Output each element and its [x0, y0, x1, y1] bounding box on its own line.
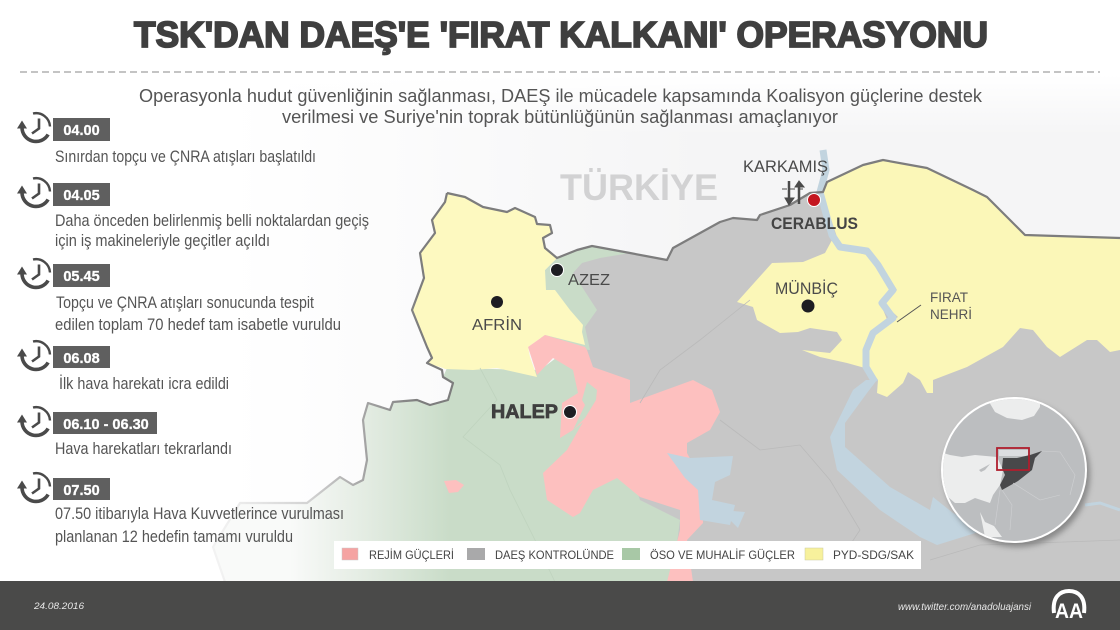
map label: Türkiye: TÜRKİYE	[560, 167, 718, 208]
region: ÖSO and opposition green	[213, 355, 680, 582]
inset sea: Black Sea	[990, 399, 1040, 420]
timeline item: 06.10 - 06.30: 06.10 - 06.30	[63, 417, 149, 433]
timeline item: 05.45: edilen toplam 70 hedef tam isabetle vuruldu	[55, 316, 341, 334]
legend: DAEŞ controlled: DAEŞ KONTROLÜNDE	[495, 548, 614, 562]
timeline item: 04.00: 04.00	[63, 123, 100, 139]
timeline item: 06.08	[17, 341, 229, 393]
inset sea: Red Sea gulf	[980, 512, 1002, 537]
timeline item: 05.45: Topçu ve ÇNRA atışları sonucunda tespit	[56, 294, 314, 312]
footer date: 24.08.2016	[33, 601, 85, 612]
subtitle: verilmesi ve Suriye'nin toprak bütünlüğünün sağlanması amaçlanıyor	[282, 107, 838, 127]
national border	[213, 193, 453, 582]
map label: Fırat Nehri: FIRAT	[930, 289, 968, 305]
inset sea: Mediterranean	[940, 452, 1003, 503]
timeline item: 06.10 - 06.30	[17, 407, 232, 458]
timeline item: 04.05	[17, 178, 369, 250]
map: control regions	[213, 150, 1120, 582]
timeline item: 06.08: İlk hava harekatı icra edildi	[59, 374, 229, 393]
map label: Fırat Nehri: NEHRİ	[930, 305, 972, 322]
timeline item: 05.45: 05.45	[63, 269, 100, 285]
map marker: Halep	[564, 406, 576, 418]
map label: Fırat Nehri	[930, 289, 972, 322]
timeline item: 04.05: 04.05	[63, 188, 100, 204]
timeline item: 07.50: 07.50 itibarıyla Hava Kuvvetlerince vurulması	[55, 505, 344, 523]
map label: Karkamış: KARKAMIŞ	[743, 157, 828, 176]
timeline item: 06.08: 06.08	[63, 351, 100, 367]
inset Syria	[1000, 451, 1042, 490]
icon: clock	[17, 341, 50, 369]
leader line: Fırat Nehri	[897, 305, 921, 322]
map label: Halep: HALEP	[491, 402, 558, 423]
map marker: Azez	[550, 264, 564, 276]
region: Aleppo corridor green	[573, 382, 597, 430]
subtitle: Operasyonla hudut güvenliğinin sağlanması, DAEŞ ile mücadele kapsamında Koalisyon güçlerine destek	[139, 86, 983, 106]
map label: Cerablus: CERABLUS	[771, 214, 858, 233]
legend: PYD-SDG/SAK: PYD-SDG/SAK	[833, 548, 914, 562]
timeline item: 07.50: planlanan 12 hedefin tamamı vuruldu	[55, 528, 293, 546]
region: regime red	[528, 335, 720, 582]
lake: Fırat reservoir	[830, 380, 985, 545]
land outside the conflict area	[230, 75, 1120, 585]
region: small red enclave	[444, 480, 464, 493]
footer twitter URL: www.twitter.com/anadoluajansi	[898, 601, 1032, 613]
timeline item: 07.50: 07.50	[63, 483, 100, 499]
dashed divider	[20, 71, 1100, 73]
locator map inset	[940, 395, 1090, 547]
timeline item: 07.50	[17, 473, 344, 546]
region: east yellow	[823, 160, 1120, 397]
icon: clock	[17, 407, 50, 435]
icon: clock	[17, 113, 50, 141]
legend: regime forces: REJİM GÜÇLERİ	[369, 548, 454, 562]
map marker: Afrin	[491, 296, 503, 308]
lake: Jabbul	[667, 453, 745, 528]
region: Münbiç yellow	[737, 240, 897, 368]
timeline item: 04.05: için iş makineleriyle geçitler açıldı	[55, 232, 270, 250]
icon: clock	[17, 473, 50, 501]
map label: Münbiç: MÜNBİÇ	[775, 279, 838, 298]
icon: clock	[17, 178, 50, 206]
faint roads	[640, 300, 1120, 560]
icon: border crossing arrows	[782, 181, 806, 205]
inset Turkey highlight	[999, 450, 1028, 456]
map marker: Cerablus	[808, 194, 820, 206]
map marker: Münbiç	[802, 300, 814, 312]
inset island: Cyprus	[979, 464, 990, 472]
river: Fırat	[820, 150, 893, 382]
river: eastern tributary	[1085, 503, 1120, 510]
region: DAEŞ controlled grey	[560, 160, 1120, 582]
inset borders	[995, 451, 1075, 530]
footer bar	[0, 581, 1120, 630]
timeline item: 04.00	[17, 113, 316, 166]
timeline item: 04.00: Sınırdan topçu ve ÇNRA atışları başlatıldı	[55, 148, 316, 166]
subtitle	[139, 86, 983, 127]
timeline item: 05.45	[17, 259, 341, 334]
inset highlight rectangle	[997, 448, 1029, 470]
legend: ÖSO and opposition forces: ÖSO VE MUHALİF GÜÇLER	[650, 548, 795, 562]
region: Azez green	[540, 246, 630, 350]
legend	[334, 541, 921, 569]
region: Afrin yellow	[412, 193, 585, 377]
inset land	[943, 399, 1085, 541]
timeline item: 06.10 - 06.30: Hava harekatları tekrarlandı	[55, 440, 232, 458]
map label: Afrin: AFRİN	[472, 315, 522, 334]
icon: Anadolu Agency logo	[1054, 591, 1084, 623]
icon: clock	[17, 259, 50, 287]
title: TSK'DAN DAEŞ'E 'FIRAT KALKANI' OPERASYONU	[134, 14, 988, 55]
timeline item: 04.05: Daha önceden belirlenmiş belli noktalardan geçiş	[55, 212, 369, 230]
icon: Anadolu Agency logo: AA	[1055, 600, 1083, 623]
map label: Azez: AZEZ	[568, 272, 610, 289]
